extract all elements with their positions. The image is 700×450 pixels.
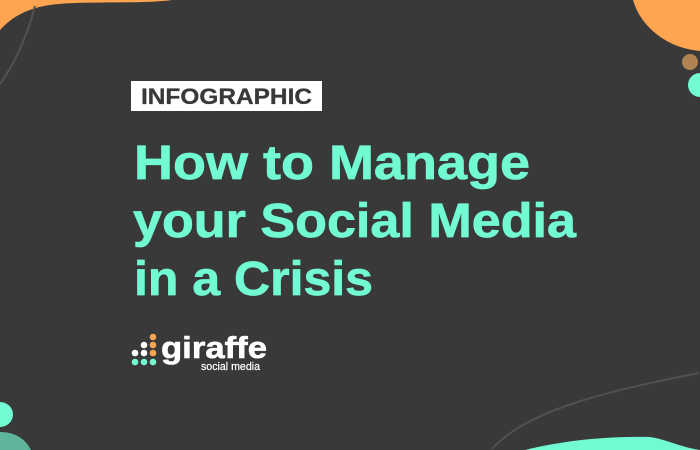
decorative shape: top-left orange wave <box>0 0 172 30</box>
logo wordmark: giraffe <box>161 330 267 365</box>
title: How to Manage <box>134 137 530 190</box>
decorative circle: muted orange dot <box>682 54 698 70</box>
icon: logo dot grid <box>132 334 156 365</box>
label badge: INFOGRAPHIC: INFOGRAPHIC <box>141 84 312 109</box>
decorative circle: mint dot <box>688 73 700 97</box>
decorative line: top-left curve <box>0 6 35 84</box>
decorative circle: bottom-left mint dot <box>0 402 13 427</box>
title: in a Crisis <box>134 253 373 306</box>
decorative line: bottom-right curve <box>492 373 699 449</box>
decorative shape: bottom-left muted teal blob <box>0 432 31 450</box>
logo tagline: social media <box>201 361 261 373</box>
decorative shape: top-right orange blob <box>633 0 700 51</box>
title: your Social Media <box>133 195 576 248</box>
label badge: INFOGRAPHIC <box>131 81 322 111</box>
title <box>133 137 576 306</box>
decorative shape: bottom-right mint wave <box>525 437 700 450</box>
logo: giraffe social media <box>132 330 267 373</box>
